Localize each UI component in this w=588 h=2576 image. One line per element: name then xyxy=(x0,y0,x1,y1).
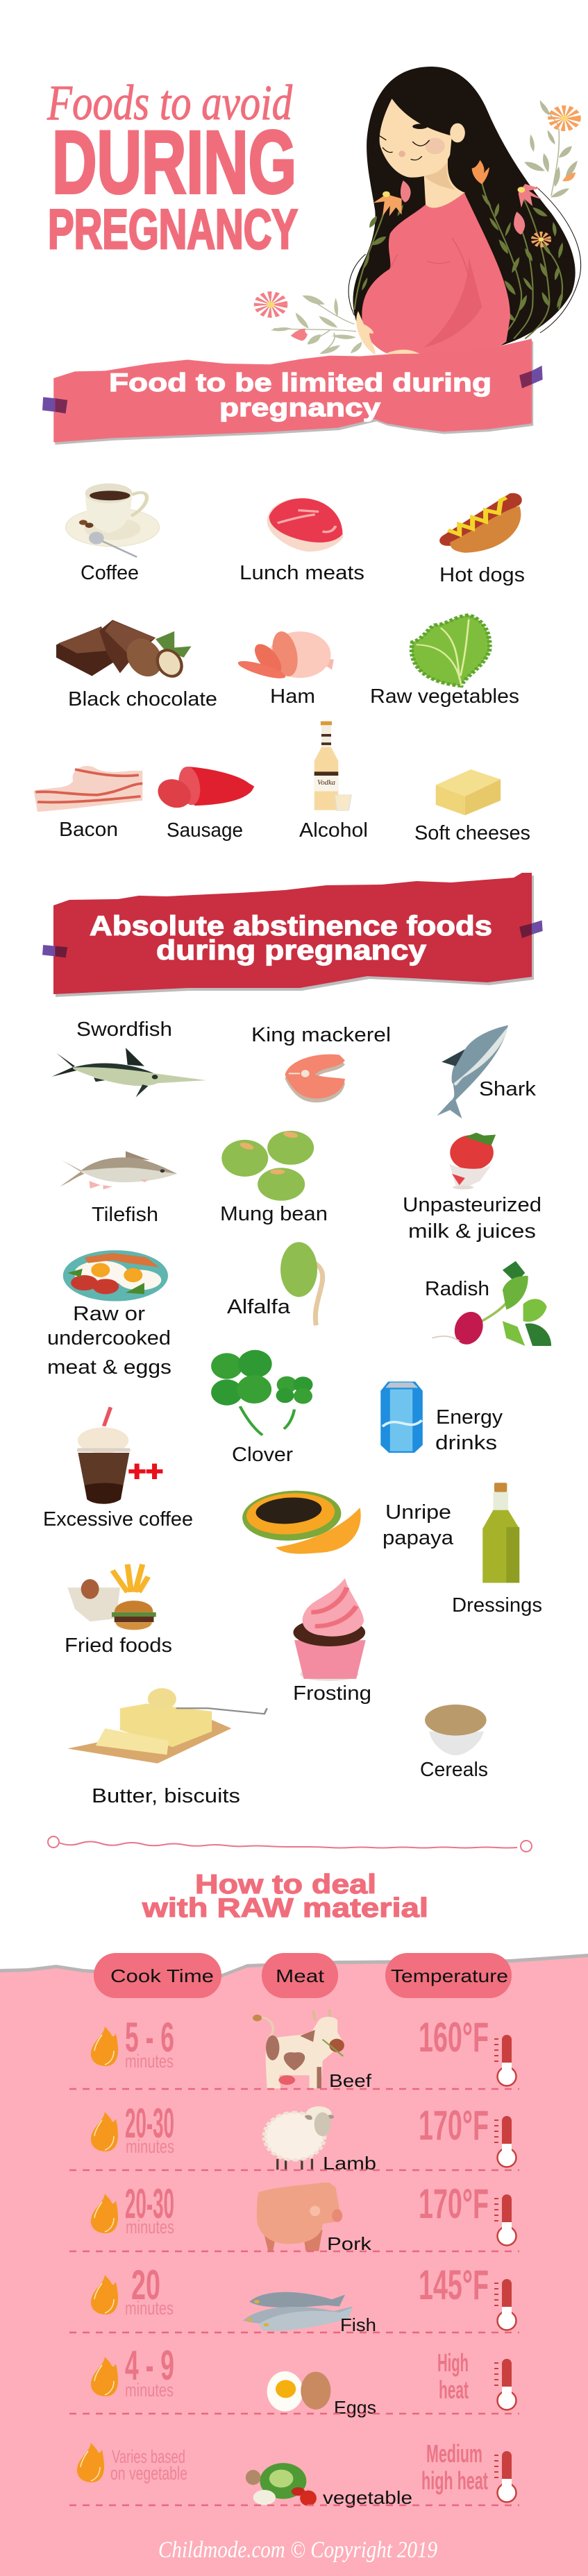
icon: fried foods xyxy=(67,1564,156,1630)
dress xyxy=(362,193,510,358)
icon: coffee xyxy=(66,484,160,557)
label: Raw or xyxy=(73,1303,145,1325)
icon: king mackerel steak xyxy=(285,1055,345,1102)
label: Unpasteurized xyxy=(403,1194,541,1216)
label: Sausage xyxy=(167,819,243,842)
column header: meat xyxy=(262,1953,338,1998)
label: Alcohol xyxy=(299,819,368,842)
icon: excessive coffee xyxy=(77,1406,162,1504)
temperature: heat xyxy=(439,2375,469,2404)
cook time: 4 - 9 xyxy=(125,2342,174,2389)
icon: alfalfa sprout xyxy=(280,1242,323,1325)
icon: ham xyxy=(235,630,334,682)
label: Bacon xyxy=(59,819,118,841)
column header: cook time xyxy=(94,1953,221,1998)
label: Soft cheeses xyxy=(414,822,530,844)
cook time: minutes xyxy=(125,2380,174,2400)
banner: absolute abstinence: during pregnancy xyxy=(156,935,427,966)
flame icon xyxy=(91,2194,118,2233)
label: Ham xyxy=(270,685,315,708)
thermometer xyxy=(494,2194,516,2245)
row: eggs xyxy=(91,2342,516,2418)
banner: food to be limited: pregnancy xyxy=(219,393,381,422)
hands xyxy=(356,311,422,361)
cook time xyxy=(110,2446,187,2484)
icon: mung bean xyxy=(221,1130,314,1201)
label: Fish xyxy=(340,2314,376,2335)
label: Raw vegetables xyxy=(370,685,519,708)
label xyxy=(383,1501,454,1549)
plant: right side xyxy=(524,101,578,197)
icon: sausage xyxy=(152,766,254,812)
label: Unripe xyxy=(385,1501,451,1524)
column header: temperature xyxy=(385,1953,512,1998)
label: Beef xyxy=(329,2070,372,2091)
label xyxy=(47,1303,171,1379)
cook time: minutes xyxy=(125,2298,174,2319)
icon: unripe papaya xyxy=(240,1487,361,1554)
icon: black chocolate xyxy=(56,620,192,680)
label: Mung bean xyxy=(220,1203,328,1225)
label: Fried foods xyxy=(65,1635,172,1657)
flame icon xyxy=(77,2443,104,2482)
label: drinks xyxy=(435,1432,497,1454)
icon: lettuce xyxy=(412,615,489,686)
temperature: high heat xyxy=(421,2466,488,2495)
temperature: 145°F xyxy=(419,2262,489,2308)
row: pork: 20-30 xyxy=(125,2181,174,2227)
label: undercooked xyxy=(47,1327,171,1349)
flame icon xyxy=(91,2027,118,2066)
label: Pork xyxy=(327,2233,372,2254)
label: Lunch meats xyxy=(240,562,364,584)
temperature xyxy=(437,2348,469,2404)
cook time: on vegetable xyxy=(110,2463,187,2484)
bottle label text: Vodka xyxy=(317,779,335,787)
flame icon xyxy=(91,2275,118,2314)
icon: cow xyxy=(253,2010,344,2088)
row: beef xyxy=(91,2010,516,2091)
label: Excessive coffee xyxy=(43,1508,193,1530)
label: Coffee xyxy=(81,562,139,584)
icon: sheep xyxy=(264,2106,334,2169)
label: Swordfish xyxy=(76,1018,172,1041)
temperature: Medium xyxy=(426,2439,482,2468)
column header: cook time: Cook Time xyxy=(110,1965,214,1986)
label: Eggs xyxy=(334,2397,376,2418)
thermometer xyxy=(494,2279,516,2330)
flame icon xyxy=(91,2112,118,2151)
tape: left xyxy=(42,945,67,957)
label: Butter, biscuits xyxy=(92,1785,240,1807)
icon: butter on board xyxy=(67,1688,267,1764)
icon: lunch meat xyxy=(267,498,343,552)
thermometer xyxy=(494,2035,516,2085)
neck and face xyxy=(423,155,465,208)
banner: absolute abstinence: Absolute abstinence foods xyxy=(90,911,492,941)
panel: cooking table xyxy=(0,1953,588,2576)
illustration: pregnant woman with flowers xyxy=(261,67,581,361)
tape: left xyxy=(42,397,67,413)
icon: hot dog xyxy=(439,493,522,553)
cook time xyxy=(125,2342,174,2400)
label: King mackerel xyxy=(251,1024,391,1046)
row: lamb: 20-30 xyxy=(125,2100,174,2147)
icon: three fish xyxy=(243,2292,353,2331)
icon: shark xyxy=(437,1025,508,1118)
icon: soft cheese xyxy=(436,769,501,815)
section: abstinence foods xyxy=(43,1018,551,1807)
wavy divider xyxy=(48,1836,532,1852)
icon: energy drink can xyxy=(380,1381,423,1453)
row: pork xyxy=(91,2181,516,2254)
title: DURING xyxy=(52,113,296,212)
tape: right xyxy=(519,921,543,938)
temperature: 170°F xyxy=(419,2181,489,2227)
cook time xyxy=(125,2014,174,2072)
temperature: 160°F xyxy=(419,2014,489,2061)
icon: pig xyxy=(257,2183,342,2251)
section: limited foods xyxy=(34,484,530,844)
label: Energy xyxy=(436,1406,503,1428)
icon: frosting cupcake xyxy=(293,1578,366,1681)
temperature: High xyxy=(437,2348,469,2377)
row: lamb xyxy=(91,2100,516,2174)
icon: tilefish xyxy=(60,1151,177,1189)
plant: lower left xyxy=(261,296,362,354)
cook time: minutes xyxy=(125,2051,174,2072)
thermometer xyxy=(494,2451,516,2502)
label: Hot dogs xyxy=(439,564,525,586)
footer copyright: Childmode.com © Copyright 2019 xyxy=(158,2537,437,2563)
hair xyxy=(353,67,576,359)
cook time: 5 - 6 xyxy=(125,2014,174,2061)
icon: radish xyxy=(432,1261,551,1346)
label: Alfalfa xyxy=(227,1296,291,1318)
title xyxy=(47,75,298,261)
label: vegetable xyxy=(323,2487,412,2508)
tape: right xyxy=(519,366,543,389)
label xyxy=(403,1194,541,1243)
icon: cereals bowl xyxy=(425,1705,487,1755)
cook time: Varies based xyxy=(112,2446,185,2467)
icon: alcohol bottle xyxy=(314,722,351,810)
label: milk & juices xyxy=(408,1220,536,1243)
cook time xyxy=(125,2181,174,2237)
icon: meat and eggs plate xyxy=(63,1250,168,1302)
icon: strawberry milk xyxy=(449,1133,496,1189)
cook time: minutes xyxy=(126,2136,174,2157)
label: Shark xyxy=(479,1078,537,1100)
icon: dressing bottle xyxy=(482,1483,519,1583)
icon: clover xyxy=(211,1350,313,1435)
flame icon xyxy=(91,2357,118,2396)
title: PREGNANCY xyxy=(48,198,298,261)
label: Cereals xyxy=(420,1759,488,1781)
label: Dressings xyxy=(452,1594,542,1617)
cook time xyxy=(125,2262,174,2319)
cook time: minutes xyxy=(126,2217,174,2237)
column header: temperature: Temperature xyxy=(391,1965,508,1986)
heading: how to deal: with RAW material xyxy=(142,1893,428,1923)
banner: food to be limited: Food to be limited during xyxy=(109,368,492,397)
row: vegetable xyxy=(77,2439,516,2508)
temperature xyxy=(421,2439,488,2495)
heading: how to deal: How to deal xyxy=(195,1870,376,1900)
hair flowers xyxy=(354,160,563,348)
banner: food to be limited xyxy=(42,339,543,445)
temperature: 170°F xyxy=(419,2102,489,2149)
thermometer xyxy=(494,2116,516,2167)
label: Frosting xyxy=(293,1682,371,1705)
label: papaya xyxy=(383,1527,454,1549)
label: Tilefish xyxy=(92,1204,158,1226)
label: Lamb xyxy=(323,2153,376,2174)
icon: swordfish xyxy=(52,1048,206,1098)
label: Clover xyxy=(232,1444,293,1466)
icon: eggs xyxy=(267,2371,330,2412)
label: Radish xyxy=(425,1278,489,1300)
title: Foods to avoid xyxy=(47,75,293,130)
heading: how to deal xyxy=(142,1870,428,1923)
label: meat & eggs xyxy=(47,1356,171,1379)
cook time xyxy=(125,2100,174,2157)
label: Black chocolate xyxy=(68,688,217,710)
banner: absolute abstinence xyxy=(42,873,543,997)
icon: vegetables xyxy=(246,2463,317,2506)
thermometer xyxy=(494,2359,516,2410)
label xyxy=(435,1406,503,1454)
row: fish xyxy=(91,2262,516,2335)
icon: bacon xyxy=(34,766,142,812)
column header: meat: Meat xyxy=(276,1965,325,1986)
cook time: 20 xyxy=(131,2262,160,2308)
